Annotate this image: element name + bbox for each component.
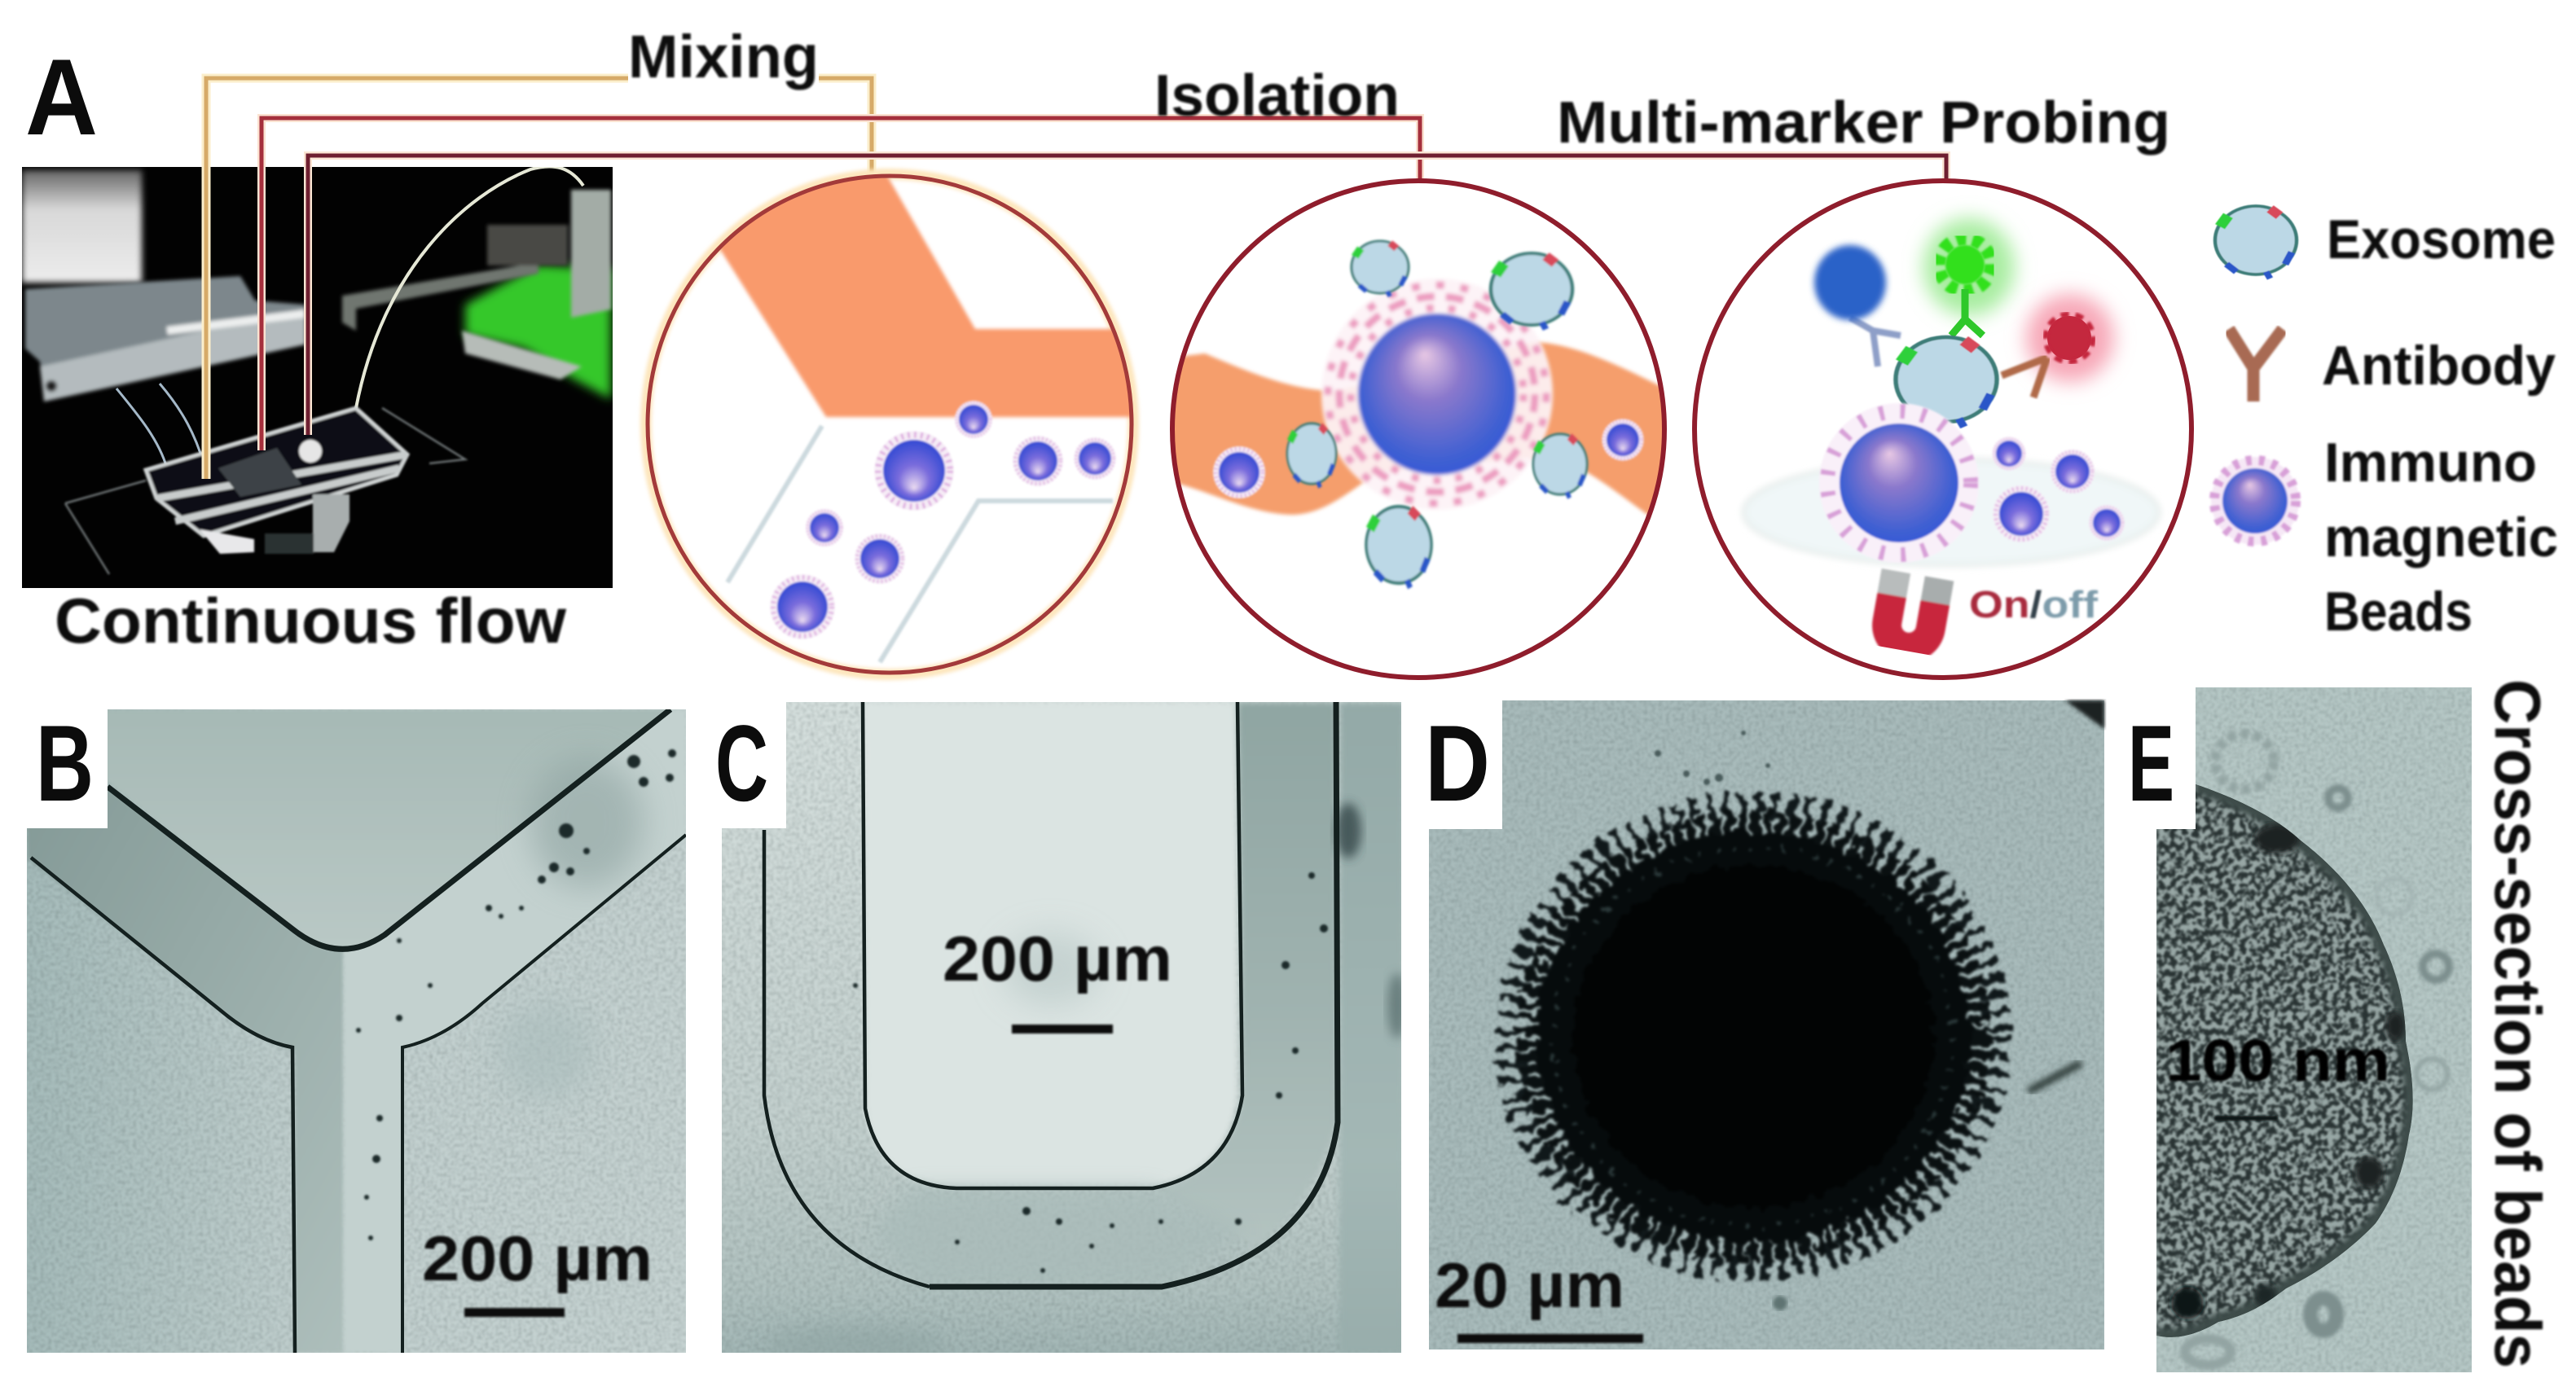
captured bead on platform: [1819, 403, 1979, 563]
legend: bead icon: [2211, 457, 2299, 545]
label box C: C: [715, 704, 768, 824]
caption: Continuous flow: Continuous flow: [55, 585, 566, 656]
blue detection marker: [1814, 245, 1901, 366]
channel walls: [764, 702, 1338, 1287]
label: On/off: On/off: [1969, 583, 2099, 625]
circle: isolation: [1165, 181, 1670, 678]
captured exosomes: [1287, 241, 1587, 588]
legend: antibody icon: [2229, 329, 2283, 402]
scale bar E: 100 nm: [2165, 1029, 2390, 1094]
legend: Immuno magnetic Beads label: Beads: [2324, 581, 2473, 643]
photo: instrument box: [22, 170, 142, 283]
photo: pump holder: [25, 276, 306, 402]
scale bar C: 200 µm: [943, 923, 1172, 994]
scale bar D: 20 µm: [1435, 1249, 1624, 1321]
panel C: U channel micrograph: [717, 702, 1407, 1362]
connector lines from chip to zoom circles: [206, 78, 1946, 479]
legend: [2211, 206, 2558, 643]
legend: exosome icon: [2215, 206, 2297, 279]
textured bead body: [2156, 782, 2417, 1344]
vertical caption: Cross-section of beads: Cross-section of beads: [2481, 679, 2554, 1368]
legend: Antibody label: Antibody: [2322, 335, 2556, 397]
beads in channel: [770, 401, 1116, 639]
icon: magnet: [1869, 568, 1954, 653]
panel D: immunomagnetic bead micrograph: [1429, 700, 2104, 1350]
big immunomagnetic bead with antibody net: [1321, 279, 1553, 510]
orange channel band: [1165, 342, 1670, 529]
inner wall region: [863, 702, 1237, 1187]
left stream: [27, 787, 344, 1353]
panel A: continuous flow photograph: [22, 166, 613, 588]
label box D: D: [1425, 704, 1490, 824]
bottom channel bend: [872, 1187, 1246, 1287]
circle: multi-marker probing: [1695, 181, 2191, 678]
photo: tubing: [116, 166, 583, 468]
scale bar E: [2165, 1029, 2390, 1121]
green detection marker: [1923, 218, 2015, 336]
right channel arm: [1157, 702, 1338, 1246]
collection platform: [1743, 459, 2159, 565]
labelled exosome: [1896, 337, 1997, 427]
beads in stream: [356, 749, 676, 1240]
panel A letter: A: [25, 37, 98, 158]
connector: multi-marker probing: [308, 156, 1946, 435]
orange channel band: [717, 163, 1141, 417]
label box B: B: [36, 704, 94, 824]
scattered debris: [2029, 1063, 2081, 1091]
heading: Mixing: Mixing: [628, 23, 819, 90]
heading: Isolation: Isolation: [1154, 64, 1400, 129]
right outer background: [1339, 702, 1404, 1353]
right stream: [344, 709, 686, 1353]
label box B: [0, 700, 108, 828]
legend: Immuno magnetic Beads label: Immuno: [2324, 432, 2537, 494]
label box E: E: [2128, 704, 2174, 824]
legend: Immuno magnetic Beads label: [2324, 432, 2558, 643]
dark corner: [2065, 700, 2104, 729]
heading: Multi-marker Probing: Multi-marker Probing: [1557, 90, 2170, 156]
scale bar C: [943, 923, 1172, 1034]
upper wedge: [98, 709, 670, 949]
panel E: bead cross-section micrograph: [2156, 687, 2472, 1372]
channel walls: [31, 709, 686, 1353]
photo: green illuminated tube: [465, 265, 611, 399]
legend: Exosome label: Exosome: [2327, 208, 2556, 270]
photo: rods and vial: [342, 190, 611, 380]
panel B: Y junction micrograph: [27, 709, 686, 1353]
legend: Immuno magnetic Beads label: magnetic: [2324, 507, 2558, 568]
bead with radial spikes: [1509, 805, 1998, 1268]
scale bar B: 200 µm: [422, 1222, 653, 1294]
circle: mixing channel: [646, 163, 1141, 674]
beads in channel: [853, 872, 1328, 1273]
exosome debris on bead surface: [2185, 734, 2449, 1365]
photo: microfluidic chip: [65, 408, 465, 574]
connector: isolation: [262, 118, 1420, 450]
connector: mixing: [206, 78, 872, 479]
free beads: [1213, 419, 1644, 498]
red detection marker: [2002, 294, 2114, 397]
scale bar D: [1435, 1249, 1643, 1343]
free beads on platform: [1993, 437, 2125, 542]
